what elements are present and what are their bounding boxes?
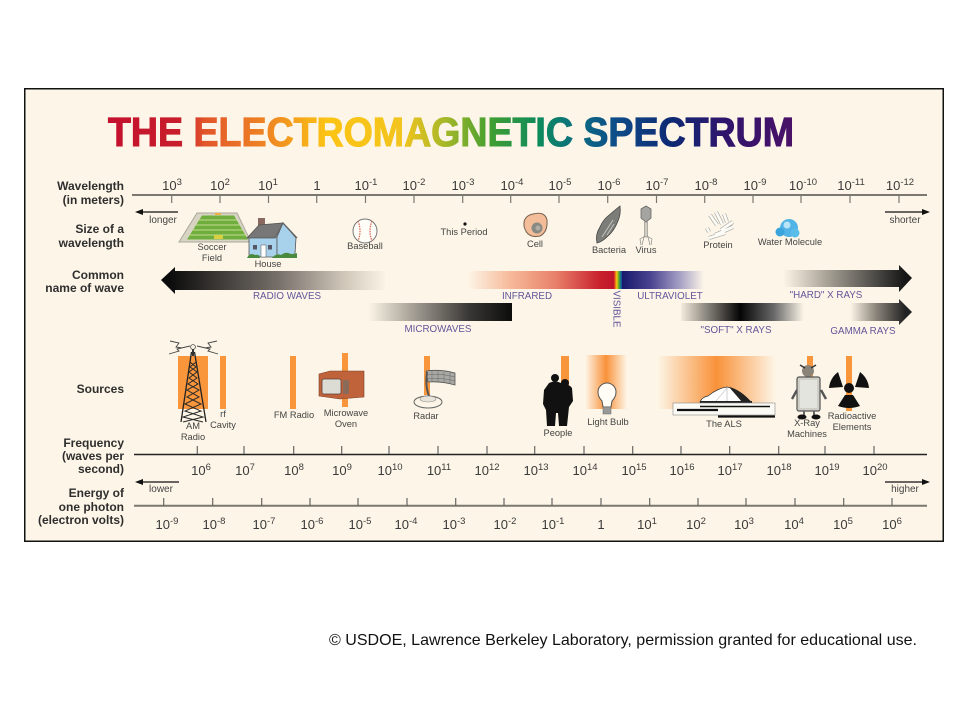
panel: spectrum chart <box>25 89 943 541</box>
energy axis: 5 <box>848 516 853 527</box>
source: rf cavity: Cavity <box>210 420 236 430</box>
energy axis: 10 <box>156 517 170 532</box>
frequency axis: 10 <box>235 463 250 478</box>
wavelength axis: 1 <box>313 178 321 193</box>
source: microwave oven: Oven <box>335 419 357 429</box>
bar: infrared: INFRARED <box>502 291 552 302</box>
energy axis: 10 <box>253 517 267 532</box>
frequency axis: 10 <box>332 463 347 478</box>
icon: baseball <box>347 219 383 251</box>
energy axis: 2 <box>701 516 706 527</box>
frequency axis: 10 <box>284 463 299 478</box>
source: AM radio: Radio <box>181 432 205 442</box>
icon: soccer field: Field <box>202 253 222 263</box>
source: x-ray machines: X-Ray <box>794 418 820 428</box>
source: rf cavity <box>210 356 236 430</box>
frequency axis: 12 <box>489 462 500 473</box>
arrow: shorter: shorter <box>889 215 921 226</box>
source: light bulb <box>585 355 629 427</box>
frequency axis: 16 <box>684 462 695 473</box>
wavelength axis: -2 <box>417 177 425 188</box>
icon: cell <box>524 213 547 249</box>
wavelength axis: 3 <box>177 177 182 188</box>
arrow: higher <box>885 479 930 495</box>
wavelength axis: -7 <box>660 177 668 188</box>
bar: infrared <box>467 271 615 302</box>
frequency axis: 17 <box>732 462 743 473</box>
arrow: gamma rays <box>830 299 912 337</box>
wavelength axis: -4 <box>515 177 523 188</box>
wavelength axis: -10 <box>803 177 817 188</box>
frequency axis: 10 <box>717 463 732 478</box>
frequency axis: 11 <box>441 462 451 473</box>
row labels <box>38 179 125 527</box>
arrow: gamma rays: GAMMA RAYS <box>830 326 896 337</box>
source: x-ray machines: Machines <box>787 429 827 439</box>
wavelength axis: 10 <box>598 178 612 193</box>
frequency axis: 10 <box>862 463 877 478</box>
arrow: longer: longer <box>149 215 178 226</box>
row labels: (in meters) <box>63 193 124 207</box>
icon: protein <box>703 212 733 250</box>
frequency axis: 7 <box>250 462 255 473</box>
frequency axis: 10 <box>814 463 829 478</box>
frequency axis: 20 <box>877 462 888 473</box>
energy axis: 10 <box>637 517 652 532</box>
source: microwave oven: Microwave <box>324 408 368 418</box>
energy axis: 3 <box>749 516 754 527</box>
wavelength axis: 10 <box>501 178 515 193</box>
credit caption: © USDOE, Lawrence Berkeley Laboratory, permission granted for educational use. <box>329 632 917 649</box>
energy axis: -8 <box>217 516 225 527</box>
wavelength axis: -8 <box>709 177 717 188</box>
energy axis: 10 <box>349 517 363 532</box>
energy axis: -1 <box>556 516 564 527</box>
energy axis: -9 <box>170 516 178 527</box>
frequency axis: 10 <box>669 463 684 478</box>
source: people <box>543 356 573 438</box>
icon: this period <box>440 222 488 237</box>
icon: virus: Virus <box>635 245 657 255</box>
bar: soft x rays <box>681 303 804 336</box>
frequency axis: 13 <box>538 462 549 473</box>
source: FM radio <box>274 356 314 420</box>
row labels: Size of a <box>75 222 124 236</box>
frequency axis: 15 <box>636 462 647 473</box>
wavelength axis: 10 <box>744 178 758 193</box>
energy axis: 10 <box>443 517 457 532</box>
frequency axis: 10 <box>427 463 441 478</box>
energy axis: 10 <box>833 517 848 532</box>
row labels: (electron volts) <box>38 513 124 527</box>
energy axis: 10 <box>395 517 409 532</box>
frequency axis <box>134 446 927 478</box>
icon: bacteria <box>592 206 627 255</box>
source: radar: Radar <box>413 411 439 421</box>
source: AM radio <box>169 341 218 442</box>
source: radioactive elements: Radioactive <box>828 411 876 421</box>
wavelength axis: 10 <box>886 178 900 193</box>
row labels: one photon <box>59 500 124 514</box>
energy axis: 10 <box>686 517 701 532</box>
wavelength axis: 10 <box>695 178 709 193</box>
frequency axis: 10 <box>392 462 403 473</box>
source: the ALS <box>657 356 776 429</box>
arrow: shorter <box>885 209 930 226</box>
source: FM radio: FM Radio <box>274 410 314 420</box>
wavelength axis: 10 <box>355 178 369 193</box>
energy axis: -2 <box>508 516 516 527</box>
source: people: People <box>544 428 572 438</box>
source: AM radio: AM <box>186 421 200 431</box>
frequency axis: 10 <box>572 463 587 478</box>
bar: ultraviolet: ULTRAVIOLET <box>637 291 703 302</box>
icon: this period: This Period <box>440 227 488 237</box>
frequency axis: 8 <box>299 462 304 473</box>
source: radioactive elements <box>828 356 876 432</box>
energy axis: 10 <box>882 517 897 532</box>
wavelength axis: -1 <box>369 177 377 188</box>
icon: cell: Cell <box>527 239 543 249</box>
wavelength axis: 10 <box>452 178 466 193</box>
icon: soccer field: Soccer <box>198 242 226 252</box>
wavelength axis: -3 <box>466 177 474 188</box>
row labels: Frequency <box>63 436 124 450</box>
frequency axis: 10 <box>474 463 489 478</box>
wavelength axis: -6 <box>612 177 620 188</box>
energy axis: 6 <box>897 516 902 527</box>
arrow: longer <box>135 209 178 226</box>
energy axis: -4 <box>409 516 417 527</box>
bar: microwaves: MICROWAVES <box>405 324 472 335</box>
energy axis: -3 <box>457 516 465 527</box>
bar: soft x rays: "SOFT" X RAYS <box>700 325 772 336</box>
source: radioactive elements: Elements <box>833 422 872 432</box>
wavelength axis: 10 <box>403 178 417 193</box>
row labels: Energy of <box>69 486 125 500</box>
row labels: second) <box>78 462 124 476</box>
wavelength axis: 10 <box>646 178 660 193</box>
frequency axis: 19 <box>829 462 840 473</box>
energy axis: -7 <box>267 516 275 527</box>
arrow: hard x rays: "HARD" X RAYS <box>790 290 863 301</box>
source: rf cavity: rf <box>220 409 226 419</box>
wavelength axis: -5 <box>563 177 571 188</box>
energy axis: -5 <box>363 516 371 527</box>
wavelength axis: -9 <box>758 177 766 188</box>
row labels: name of wave <box>45 281 124 295</box>
energy axis: 10 <box>542 517 556 532</box>
wavelength axis: -12 <box>900 177 914 188</box>
row labels: Sources <box>77 382 124 396</box>
frequency axis: 10 <box>377 463 392 478</box>
wavelength axis: 2 <box>225 177 230 188</box>
energy axis: 1 <box>597 517 605 532</box>
energy axis: -6 <box>315 516 323 527</box>
wavelength axis: 10 <box>549 178 563 193</box>
wavelength axis: 10 <box>210 178 225 193</box>
row labels: wavelength <box>58 236 124 250</box>
frequency axis: 10 <box>621 463 636 478</box>
energy axis: 10 <box>784 517 799 532</box>
energy axis: 4 <box>799 516 804 527</box>
bar: ultraviolet <box>622 271 704 302</box>
icon: water molecule <box>758 219 822 247</box>
row labels: Wavelength <box>57 179 124 193</box>
arrow: radio waves <box>161 267 387 302</box>
source: microwave oven <box>319 353 368 429</box>
bar: visible <box>610 271 623 328</box>
icon: water molecule: Water Molecule <box>758 237 822 247</box>
energy axis: 10 <box>301 517 315 532</box>
energy axis: 10 <box>203 517 217 532</box>
source: the ALS: The ALS <box>706 419 742 429</box>
energy axis: 10 <box>494 517 508 532</box>
source: x-ray machines <box>787 356 827 439</box>
icon: soccer field <box>179 213 251 263</box>
arrow: higher: higher <box>891 484 920 495</box>
icon: bacteria: Bacteria <box>592 245 627 255</box>
icon: protein: Protein <box>703 240 733 250</box>
frequency axis: 10 <box>523 463 538 478</box>
arrow: radio waves: RADIO WAVES <box>253 291 321 302</box>
frequency axis: 10 <box>766 463 781 478</box>
energy axis <box>134 498 927 532</box>
energy axis: 1 <box>652 516 657 527</box>
source: light bulb: Light Bulb <box>587 417 629 427</box>
title: THE ELECTROMAGNETIC SPECTRUM <box>108 109 794 155</box>
icon: baseball: Baseball <box>347 241 383 251</box>
wavelength axis: 10 <box>258 178 273 193</box>
arrow: lower: lower <box>149 484 174 495</box>
frequency axis: 14 <box>587 462 598 473</box>
wavelength axis: -11 <box>852 177 865 188</box>
frequency axis: 9 <box>347 462 352 473</box>
frequency axis: 10 <box>191 463 206 478</box>
frequency axis: 6 <box>206 462 211 473</box>
icon: house <box>247 218 297 269</box>
row labels: Common <box>72 268 124 282</box>
bar: visible: VISIBLE <box>610 290 622 328</box>
row labels: (waves per <box>62 449 124 463</box>
energy axis: 10 <box>734 517 749 532</box>
icon: virus <box>635 206 657 255</box>
source: radar <box>413 356 455 421</box>
bar: microwaves <box>368 303 512 335</box>
arrow: lower <box>135 479 179 495</box>
wavelength axis <box>132 177 927 203</box>
wavelength axis: 10 <box>789 178 803 193</box>
wavelength axis: 1 <box>273 177 278 188</box>
arrow: hard x rays <box>783 265 912 301</box>
wavelength axis: 10 <box>837 178 852 193</box>
icon: house: House <box>255 259 281 269</box>
frequency axis: 18 <box>781 462 792 473</box>
wavelength axis: 10 <box>162 178 177 193</box>
